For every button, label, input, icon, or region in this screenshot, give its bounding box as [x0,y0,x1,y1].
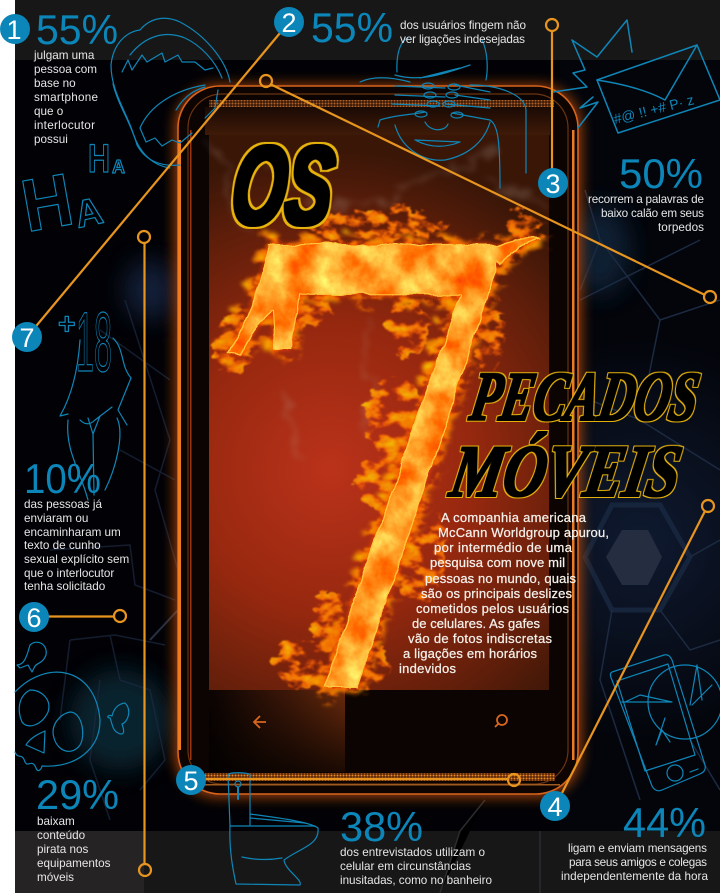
stat 7 [12,322,129,593]
stat 4: 4 [547,792,563,822]
stat 2: ver ligações indesejadas [400,33,525,46]
stat 1 [0,6,118,146]
stat 6: pirata nos [37,843,88,856]
stat 3: 3 [545,169,561,199]
sketch: toilet [228,773,318,885]
sketch: angry envelope [553,20,720,133]
smartphone [174,84,582,798]
stat 6: móveis [37,871,74,884]
stat 5: dos entrevistados utilizam o [340,846,485,859]
stat 3 [538,150,704,234]
stat 1: possui [34,133,68,146]
title: OS: OS [226,122,340,248]
stat 5: 5 [183,766,199,796]
stat 2: dos usuários fingem não [400,19,526,32]
stat 5: inusitadas, como no banheiro [340,874,492,887]
stat 1: base no [34,77,76,90]
sketch: woman and +18: 18 [76,295,112,389]
smoke [210,140,545,460]
sketch: Ha Ha letters: A [71,190,107,237]
stat 5 [176,765,492,887]
stat 7: enviaram ou [24,512,88,525]
sketch: screaming mouth [111,18,230,168]
stat 7: sexual explícito sem [24,553,129,566]
intro text: de celulares. As gafes [412,616,540,631]
stat 2: 2 [281,8,297,38]
flames around the 7 [215,209,543,689]
stat 6: equipamentos [37,857,111,870]
sketch: Ha Ha letters: H [88,137,110,181]
stat 7: das pessoas já [24,498,102,511]
stat 1: 55% [36,6,118,53]
big flaming 7: 7 [221,84,548,835]
intro text: são os principais deslizes [421,586,572,601]
stat 3: recorrem a palavras de [588,193,704,206]
icon: back arrow [254,716,266,728]
stat 3: baixo calão em seus [601,207,704,220]
stat 6: 29% [36,771,119,818]
sketch: Ha Ha letters: H [15,157,79,248]
intro text: a ligações em horários [403,646,538,661]
stat 1: 1 [6,15,22,45]
stat 7: que o interlocutor [24,567,114,580]
stat 1: smartphone [34,91,98,104]
stat 3: 50% [619,150,703,197]
stat 6: conteúdo [37,829,86,842]
sketch: face covered by fingers [360,38,526,188]
intro text: indevidos [399,661,456,676]
stat 1: pessoa com [34,63,97,76]
icon: search [495,715,507,727]
stat 7: tenha solicitado [24,580,106,593]
stat 4: para seus amigos e colegas [569,856,707,869]
stat 2 [274,4,526,51]
stat 4: ligam e enviam mensagens [568,842,707,855]
stat 1: interlocutor [34,119,95,132]
stat 1: julgam uma [33,49,95,62]
stat 6 [19,602,119,884]
stat 6: 6 [26,603,42,633]
intro text: cometidos pelos usuários [416,601,570,616]
intro text: por intermédio de uma [434,540,573,555]
sketch: Ha Ha letters: A [112,157,125,177]
intro text: A companhia americana [441,510,587,525]
sketch: woman and +18: + [58,308,76,341]
sketch: woman and +18 [58,295,131,500]
intro text: pessoas no mundo, quais [425,571,576,586]
envelope symbols: #@ !! +# P· z [612,91,696,127]
stat 1: que o [34,105,64,118]
stat 7: 10% [24,455,101,502]
stat 3: torpedos [658,221,704,234]
stat 2: 55% [311,4,393,51]
stat 7: texto de cunho [24,539,101,552]
stat 4: independentemente da hora [561,870,708,883]
stat 6: baixam [37,815,75,828]
stat 5: celular em circunstâncias [340,860,471,873]
intro text [399,510,609,676]
intro text: pesquisa com nove mil [430,555,565,570]
sketch: Ha Ha letters [15,137,125,248]
stat 7: encaminharam um [24,526,121,539]
stat 5: 38% [340,803,423,850]
sketch: skull [15,642,129,771]
intro text: McCann Worldgroup apurou, [438,525,609,540]
stat 4 [540,791,708,883]
stat 4: 44% [623,799,706,846]
sketch: smartphone and compass [610,655,720,791]
phone screen [209,135,549,690]
stat 7: 7 [19,323,35,353]
intro text: vão de fotos indiscretas [408,631,552,646]
